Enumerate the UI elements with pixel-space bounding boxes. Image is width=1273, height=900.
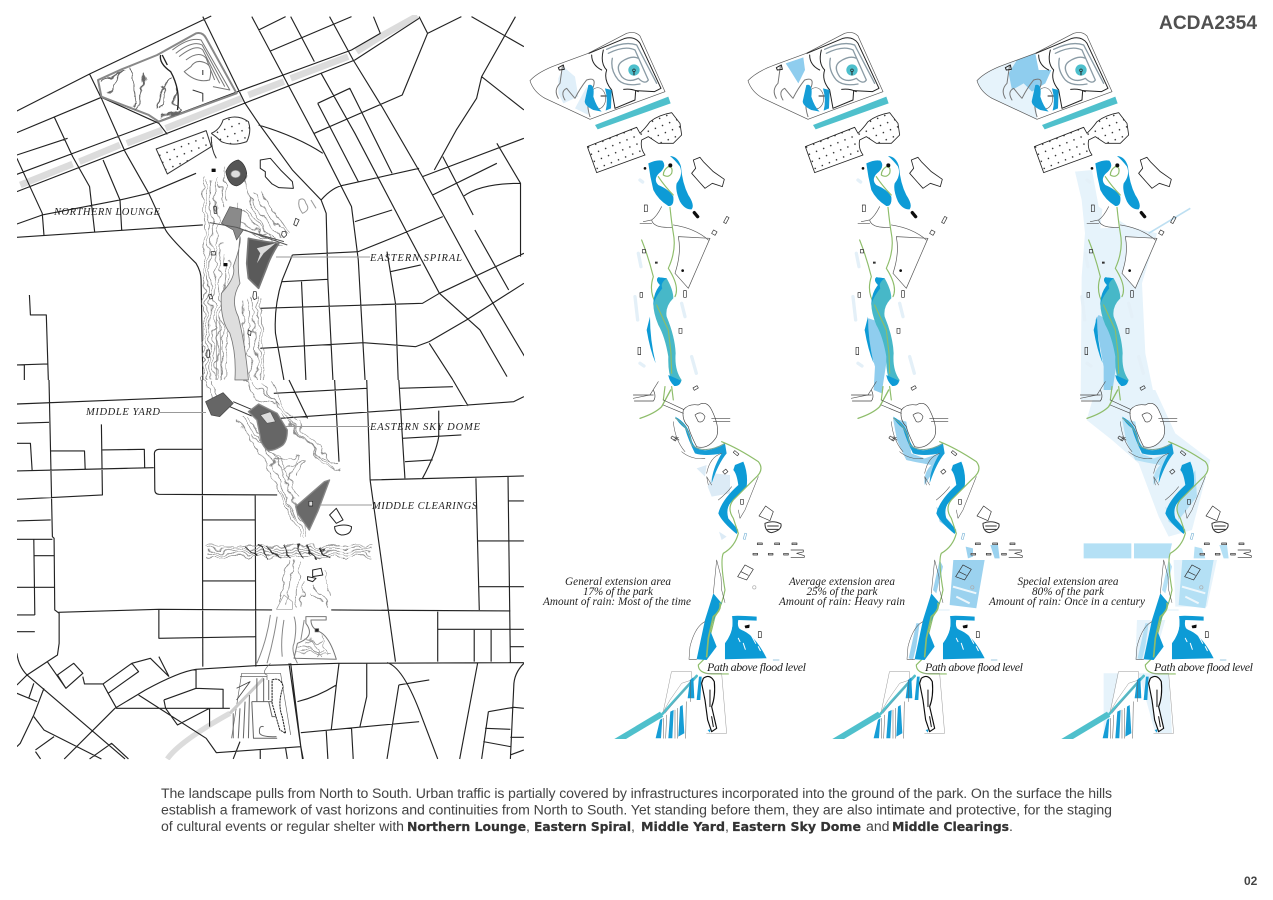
north half of plan [977, 32, 1176, 400]
mound texture [297, 637, 333, 657]
flood panel 2: average extension area [748, 32, 1024, 739]
label: Northern Lounge: NORTHERN LOUNGE [53, 207, 161, 218]
western and eastern contour lines [203, 160, 287, 380]
south half of plan [614, 390, 804, 739]
description paragraph [161, 785, 1112, 835]
south half of plan [1061, 390, 1251, 739]
eastern spiral hill [247, 238, 279, 288]
label: Eastern Spiral: EASTERN SPIRAL [369, 253, 462, 264]
description paragraph: Northern Lounge [407, 820, 526, 835]
top-left park outline [98, 33, 237, 122]
hill core [231, 170, 240, 178]
clearing pavilion [309, 501, 313, 506]
description paragraph: Eastern Sky Dome [732, 820, 861, 835]
southern park contours [204, 380, 372, 738]
percentage: 80% of the park [1032, 586, 1105, 598]
project code: ACDA2354 [1159, 12, 1257, 34]
urban road network, south part [17, 380, 524, 759]
north half of plan [530, 32, 729, 400]
plot outlines east of park [260, 158, 293, 188]
pale water wash [558, 67, 588, 115]
path label: Path above flood level [1153, 660, 1254, 674]
rain: Amount of rain: Heavy rain [778, 596, 905, 608]
label: Middle Yard: MIDDLE YARD [85, 407, 160, 418]
bridge to sky dome [230, 401, 252, 416]
strips north of mound [257, 615, 304, 663]
block pavilions [308, 508, 352, 582]
urban road network, north part [17, 16, 531, 380]
description paragraph: , [526, 818, 530, 834]
pale water, south [893, 418, 1000, 660]
description paragraph: and [866, 818, 890, 834]
caption: General extension area [565, 576, 671, 588]
street map with park plan [17, 16, 531, 759]
page number: 02 [1244, 874, 1258, 888]
bottom park contours [232, 663, 291, 738]
rain: Amount of rain: Most of the time [542, 596, 691, 608]
northern lounge wedge [221, 207, 243, 240]
description paragraph: Eastern Spiral [534, 820, 631, 835]
percentage: 17% of the park [583, 586, 654, 598]
middle yard wedge [206, 393, 233, 417]
pale water, north [786, 57, 888, 393]
river [221, 237, 248, 380]
contours south of band [279, 562, 330, 607]
flood panel 1: general extension area [530, 32, 807, 739]
percentage: 25% of the park [806, 586, 879, 598]
description paragraph: establish a framework of vast horizons and continuities from North to South. Yet standing before them, they are also intimate and protective, for the staging [161, 802, 1112, 818]
label: Middle Clearings: MIDDLE CLEARINGS [371, 501, 478, 512]
sky dome hill [248, 404, 287, 450]
sky dome core [260, 412, 275, 423]
middle clearings hill [296, 480, 330, 530]
white gaps in band [341, 543, 350, 560]
pale wash, south [1084, 390, 1229, 737]
description paragraph: , [725, 818, 729, 834]
description paragraph: of cultural events or regular shelter with [161, 818, 404, 834]
description paragraph: . [1009, 818, 1013, 834]
flood panel 3: special extension area [977, 32, 1254, 739]
spiral highlight [257, 243, 275, 263]
dark hill: north [226, 160, 247, 186]
lower wash [697, 465, 730, 540]
textured horizontal band [207, 545, 372, 558]
path label: Path above flood level [706, 660, 807, 674]
north half of plan [748, 32, 947, 400]
path label: Path above flood level [924, 660, 1024, 674]
pavilions north [207, 207, 299, 357]
dotted plaza [156, 117, 250, 174]
south half of plan [832, 390, 1022, 739]
description paragraph: The landscape pulls from North to South. Urban traffic is partially covered by infrastructures incorporated into the ground of the park. On the surface the hills [161, 785, 1112, 801]
description paragraph: , [631, 818, 635, 834]
caption: Average extension area [788, 576, 895, 588]
caption: Special extension area [1018, 576, 1119, 588]
lower mound [294, 617, 336, 659]
rain: Amount of rain: Once in a century [988, 596, 1145, 608]
northern park contours [98, 33, 316, 380]
pale wash, north [977, 53, 1190, 400]
label: Eastern Sky Dome: EASTERN SKY DOME [369, 422, 481, 433]
site labels with leader lines [53, 207, 481, 512]
diagonal contour lines [204, 380, 338, 537]
bridge across the lounge [210, 223, 287, 245]
description paragraph: Middle Clearings [892, 820, 1009, 835]
description paragraph: Middle Yard [641, 820, 725, 835]
